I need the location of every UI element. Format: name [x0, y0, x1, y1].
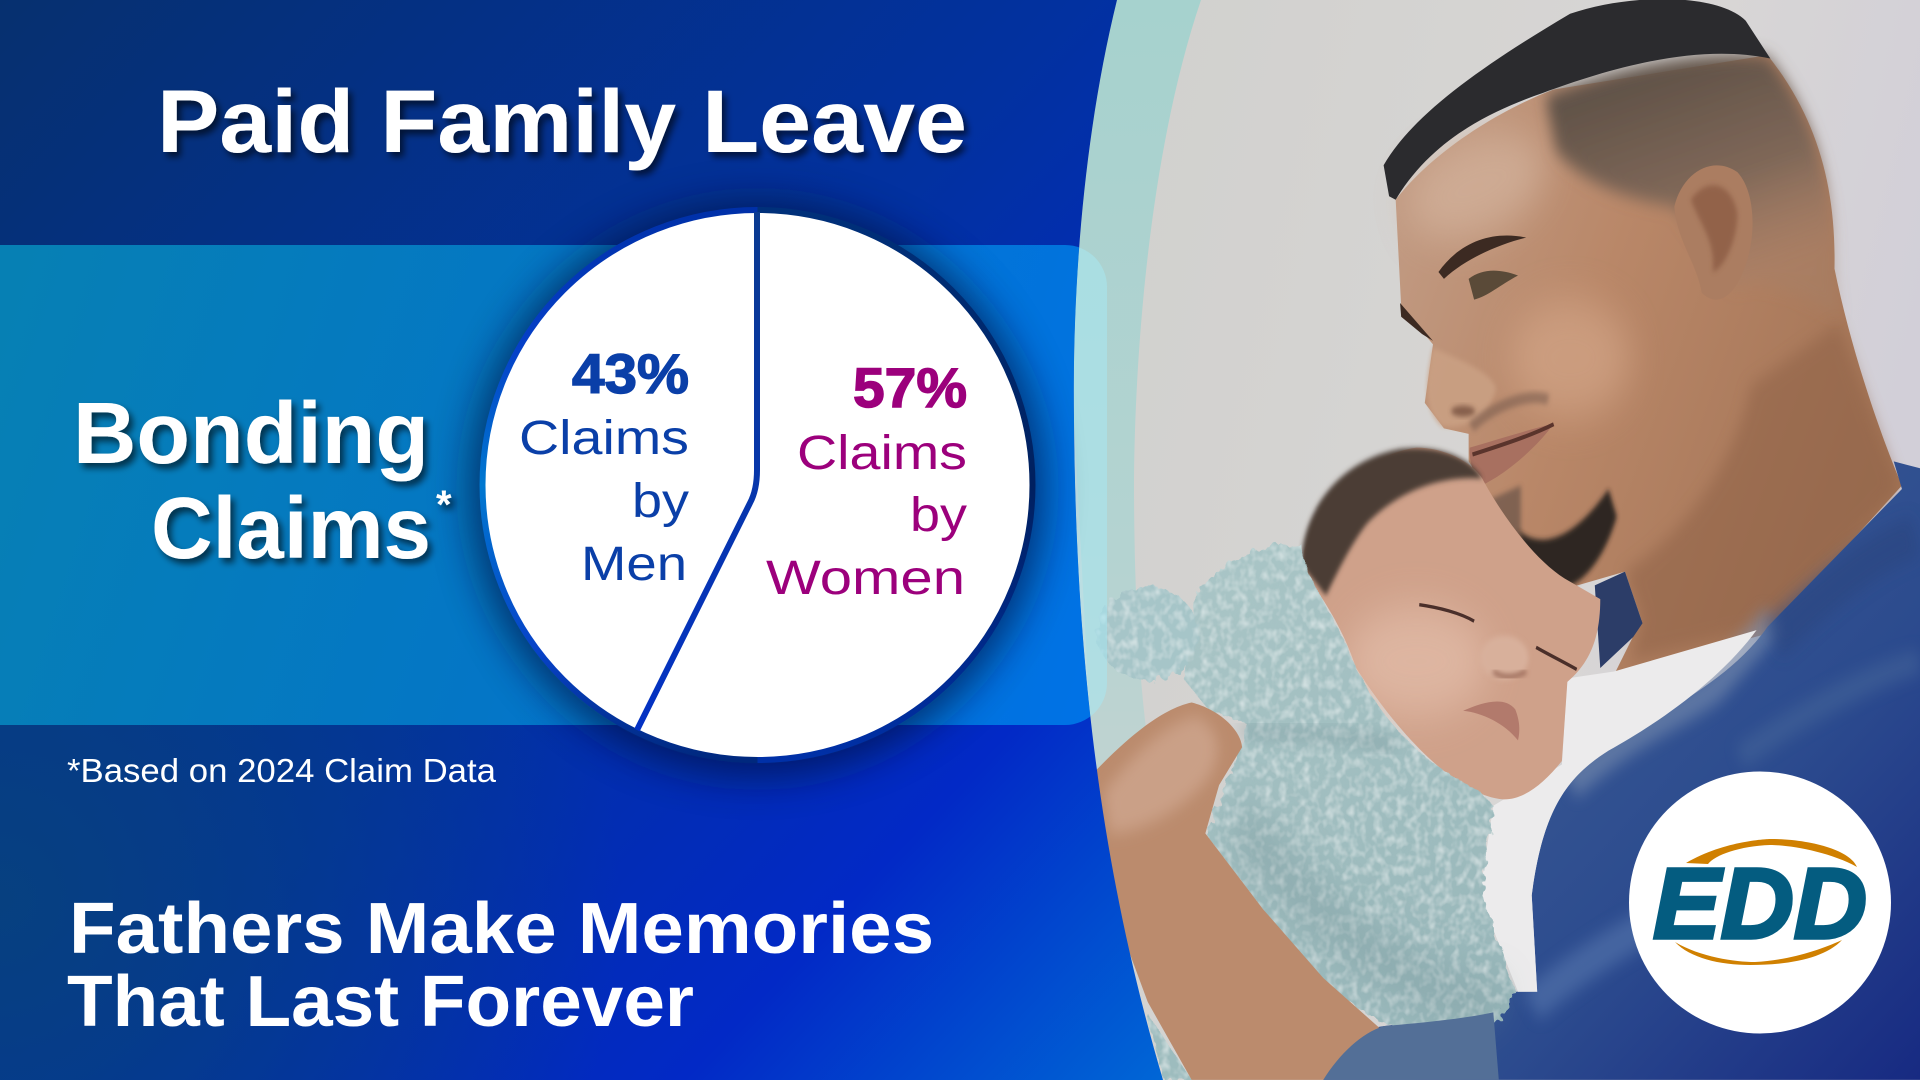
- jacket fold dark: [1740, 661, 1920, 758]
- inner ear: [1691, 185, 1737, 272]
- lower blanket sliver: [1147, 1012, 1192, 1080]
- pie ring left: [482, 210, 758, 760]
- men caption line 1: Claims: [519, 412, 689, 465]
- women caption line 1: Claims: [797, 427, 967, 480]
- jacket upper shoulder shade: [1773, 537, 1916, 640]
- moustache stubble: [1471, 398, 1548, 427]
- translucent banner: blue part: [0, 245, 1107, 725]
- men percentage: 43%: [572, 342, 689, 405]
- pie ring right: [758, 210, 1032, 760]
- tagline line 2: That Last Forever: [67, 962, 694, 1042]
- forehead highlight: [1397, 112, 1557, 259]
- goatee beard: [1518, 489, 1617, 589]
- smile line: [1472, 424, 1554, 455]
- baby cheek light: [1345, 606, 1488, 716]
- blanket body: [1183, 544, 1515, 1040]
- heading line 2: Claims: [151, 480, 431, 577]
- pie chart: [470, 201, 1046, 777]
- men caption line 3: Men: [581, 538, 687, 591]
- baby eye near: [1419, 605, 1474, 621]
- heading asterisk: *: [436, 483, 452, 527]
- fleece blanket: [1097, 544, 1515, 1080]
- women percentage: 57%: [853, 356, 967, 419]
- EDD logo: [1629, 772, 1891, 1034]
- hand highlight: [1104, 716, 1218, 833]
- nostril: [1451, 406, 1475, 417]
- baby nose: [1480, 636, 1528, 680]
- chin stubble: [1491, 486, 1521, 537]
- women caption line 3: Women: [766, 552, 965, 605]
- jacket fold light: [1532, 854, 1800, 1006]
- baby head: [1304, 448, 1600, 799]
- footnote: *Based on 2024 Claim Data: [67, 752, 497, 789]
- pie shadow: [470, 201, 1046, 777]
- father's hand and forearm: [1082, 702, 1384, 1080]
- white shirt: [1480, 630, 1757, 992]
- shaved side of hair: [1545, 55, 1839, 317]
- left blue panel: [0, 0, 1200, 1080]
- blanket fold shadow: [1241, 730, 1395, 747]
- father's head and neck: [1396, 55, 1902, 675]
- photo: father holding sleeping baby: [1060, 0, 1920, 1080]
- ear: [1674, 165, 1753, 300]
- heading line 1: Bonding: [73, 385, 429, 482]
- logo bottom swoosh: [1675, 940, 1842, 965]
- tagline: [67, 889, 934, 1042]
- baby hair: [1301, 448, 1482, 596]
- denim jacket: [1323, 461, 1920, 1080]
- eyebrow near: [1438, 236, 1526, 279]
- mouth: [1470, 424, 1554, 486]
- logo white circle: [1629, 772, 1891, 1034]
- translucent banner: over the photo: [1074, 248, 1107, 716]
- teal curved band: [1074, 0, 1201, 1000]
- blanket lower shadow: [1225, 792, 1510, 1026]
- eyebrow far: [1400, 303, 1433, 341]
- panel dark left glow: [0, 725, 518, 1080]
- pie divider: [637, 212, 757, 730]
- cheek highlight: [1510, 300, 1630, 417]
- heading: bonding claims: [73, 385, 452, 577]
- jacket sleeve cuff: [1323, 1012, 1499, 1080]
- logo wordmark: EDD: [1653, 848, 1867, 960]
- photo background wall: [1060, 0, 1920, 1080]
- baby eye far: [1536, 647, 1577, 669]
- panel gradient base: [0, 0, 1200, 1080]
- jacket behind neck: [1595, 572, 1643, 668]
- jacket collar fold: [1570, 620, 1773, 785]
- label: women: [766, 356, 967, 605]
- tagline line 1: Fathers Make Memories: [69, 889, 934, 969]
- women caption line 2: by: [910, 489, 967, 542]
- eye: [1469, 271, 1518, 300]
- slicked dark hair: [1384, 0, 1770, 200]
- nose: [1427, 348, 1496, 427]
- father and baby figure: [1082, 0, 1920, 1080]
- men caption line 2: by: [632, 475, 689, 528]
- baby lips: [1463, 702, 1519, 740]
- logo top swoosh: [1686, 839, 1857, 867]
- title: Paid Family Leave: [157, 71, 967, 171]
- pom-pom: [1097, 587, 1198, 680]
- neck shadow: [1625, 324, 1899, 661]
- pie disc: [482, 210, 1032, 760]
- label: men: [519, 342, 689, 591]
- baby nostril: [1493, 671, 1526, 677]
